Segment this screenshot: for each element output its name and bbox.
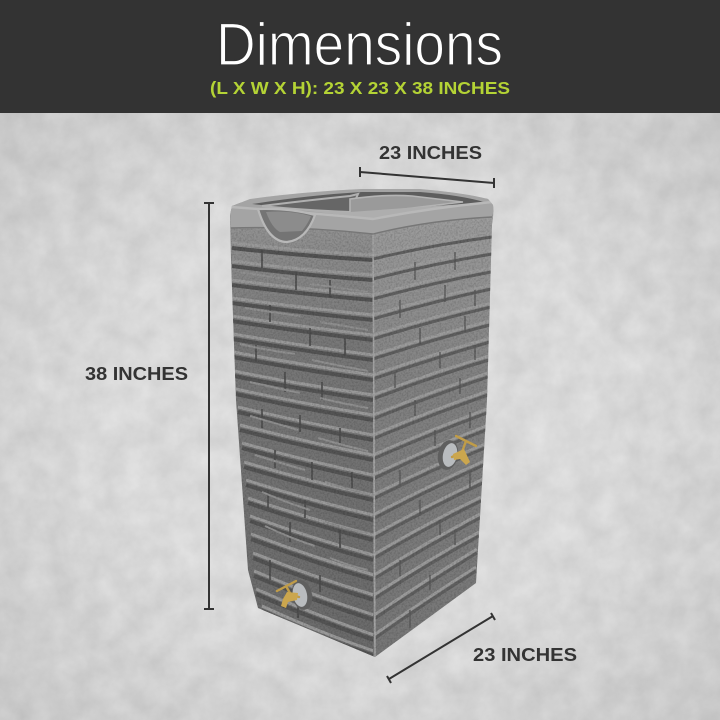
dimension arrow: top width [360, 167, 494, 188]
subtitle: (L X W X H): 23 X 23 X 38 INCHES [210, 78, 510, 98]
label: height: 38 INCHES [85, 363, 188, 384]
header band [0, 0, 720, 113]
washer [289, 578, 315, 612]
dimension arrow: bottom depth [387, 613, 495, 683]
dimension arrow: height [204, 203, 214, 609]
corner seam [373, 226, 375, 657]
brass tap [452, 436, 476, 457]
barrel right face [373, 195, 500, 660]
stone grain [230, 214, 493, 657]
label: top width: 23 INCHES [379, 142, 482, 163]
spout notch [258, 209, 315, 242]
top rim and lid [230, 188, 495, 234]
rain barrel [225, 185, 500, 660]
barrel left face [225, 200, 374, 660]
title: Dimensions [216, 11, 503, 78]
label: bottom depth: 23 INCHES [473, 644, 577, 665]
washer [435, 438, 461, 472]
lower spigot [277, 578, 315, 612]
brass tap [277, 581, 299, 597]
right spigot [435, 436, 476, 472]
